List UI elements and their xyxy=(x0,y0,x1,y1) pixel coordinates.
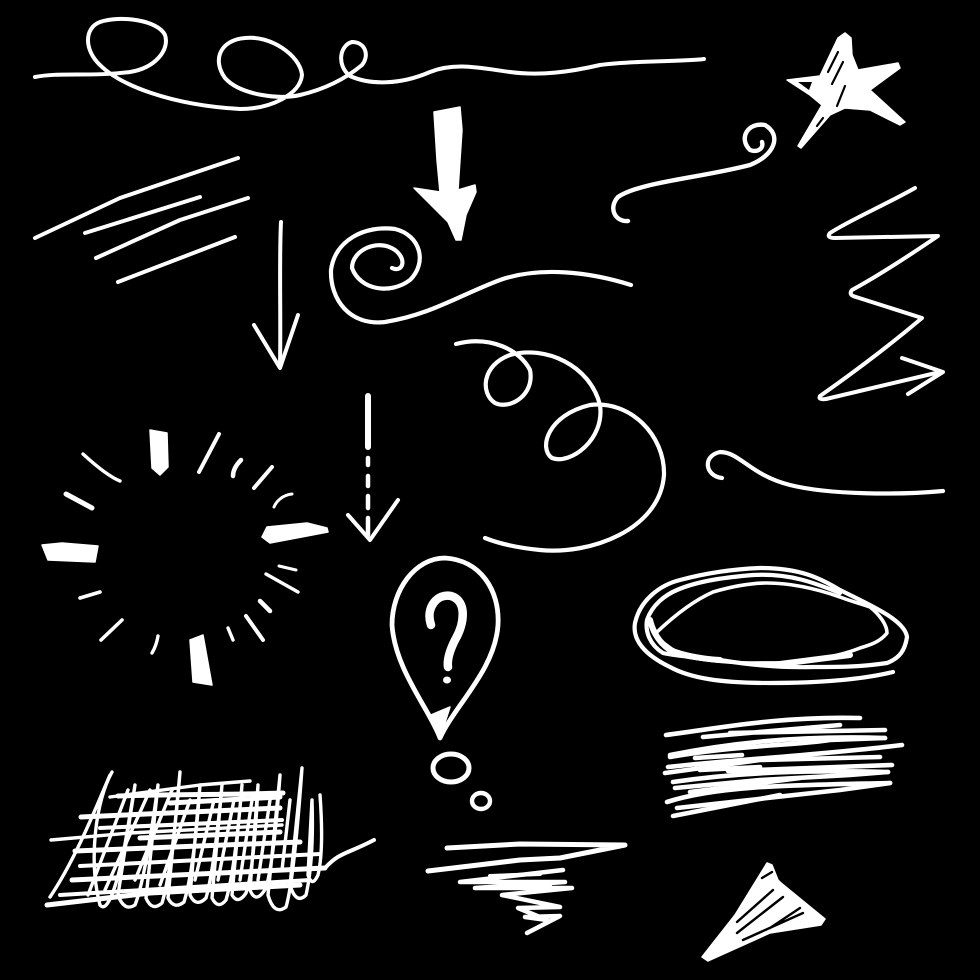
shaded triangle xyxy=(702,863,825,961)
grid scribble xyxy=(47,768,374,910)
tail fill xyxy=(431,707,450,738)
dashed down arrow xyxy=(348,396,398,540)
sunburst rays xyxy=(42,430,328,685)
question mark xyxy=(429,596,463,667)
vertical loops xyxy=(94,768,322,910)
coil line xyxy=(456,341,664,551)
hook line right xyxy=(708,452,943,493)
bubble outline xyxy=(392,558,498,738)
bold down arrow xyxy=(414,107,476,240)
hand drawn oval xyxy=(635,568,907,683)
funnel scribble xyxy=(428,844,625,933)
horizontal strokes xyxy=(110,781,250,797)
icon: star xyxy=(787,33,905,148)
zigzag arrow xyxy=(820,188,943,399)
thin down arrow xyxy=(254,222,298,368)
small bubbles xyxy=(433,754,469,782)
question mark thought bubble xyxy=(392,558,498,809)
curl line top right xyxy=(613,125,774,221)
spiral with tail xyxy=(331,228,631,322)
hatch lines upper left xyxy=(35,158,248,282)
horizontal scribble block xyxy=(665,718,902,816)
looped wavy line at top xyxy=(35,19,704,109)
